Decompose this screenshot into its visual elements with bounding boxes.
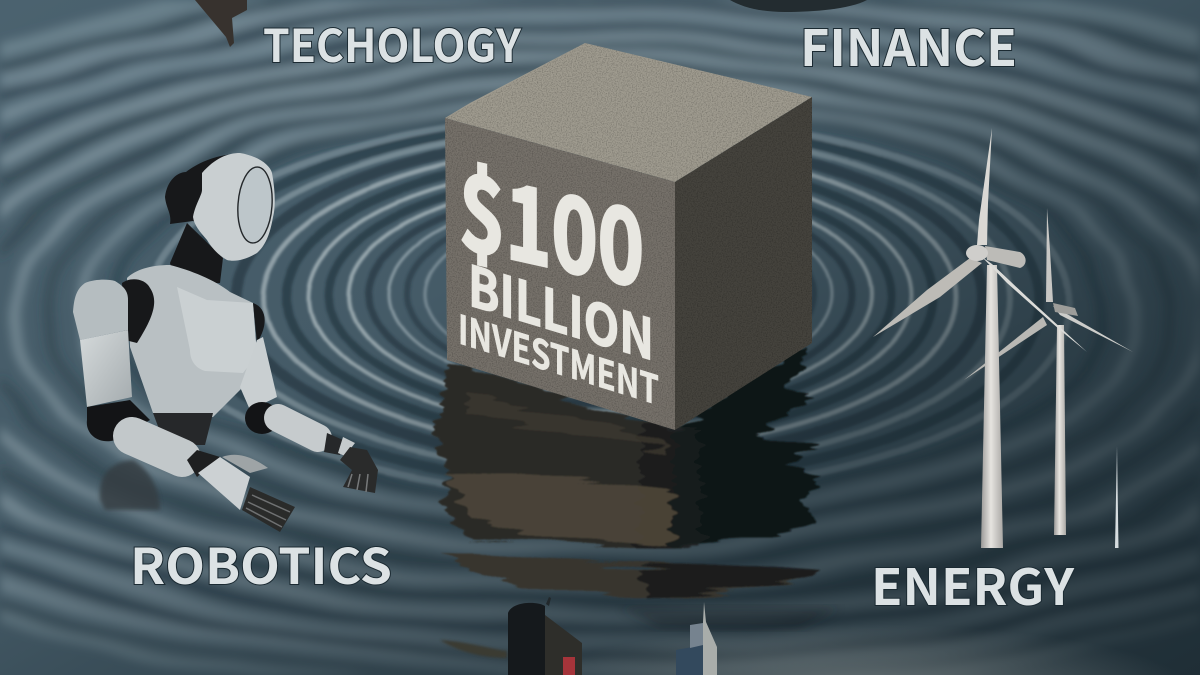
robot neck <box>170 223 223 285</box>
reflection: streaked body <box>436 345 822 598</box>
glass tower <box>676 602 717 675</box>
cube right face <box>675 97 812 430</box>
city skyline <box>508 597 717 675</box>
robot far shoulder joint <box>253 303 265 343</box>
robot far forearm <box>278 418 318 438</box>
technology icon fragment <box>195 0 247 47</box>
cube top face <box>445 43 812 182</box>
robot far wrist <box>324 433 343 455</box>
robot thumb plate <box>222 455 268 473</box>
cube left face <box>445 118 675 430</box>
distant mast <box>1115 446 1118 548</box>
label: technology: TECHOLOGY <box>263 10 522 75</box>
robot fingers <box>242 487 295 532</box>
central ripples <box>150 115 1070 495</box>
wind turbines <box>873 128 1133 548</box>
robot base wheel <box>100 460 160 510</box>
label: energy: ENERGY <box>871 548 1075 620</box>
rear turbine <box>964 208 1133 535</box>
robot elbow <box>87 400 150 441</box>
cube label <box>458 127 659 417</box>
robot shoulder joint <box>122 279 154 343</box>
robot far hand <box>340 447 378 493</box>
dollar amount: $100 <box>459 127 644 318</box>
cube grain texture <box>445 43 812 430</box>
robot far elbow <box>245 402 279 434</box>
dark tower <box>508 597 582 675</box>
robot upper arm cap <box>73 280 128 340</box>
cube <box>445 43 812 430</box>
robot hand plate <box>198 457 250 510</box>
billion word: BILLION <box>468 241 654 377</box>
robot waist <box>153 413 213 445</box>
label: finance: FINANCE <box>800 9 1017 81</box>
investment word: INVESTMENT <box>458 297 659 417</box>
robot chest plate <box>177 287 257 373</box>
front turbine <box>873 128 1087 548</box>
sky beneath reflection <box>440 608 1200 675</box>
robot wrist <box>187 450 220 477</box>
reflection of cube in water <box>436 345 822 598</box>
robot far arm <box>240 337 277 410</box>
label: robotics: ROBOTICS <box>130 528 392 599</box>
robot torso <box>127 265 257 417</box>
finance icon fragment <box>730 0 867 12</box>
robot <box>73 153 378 532</box>
robot forearm <box>132 436 182 458</box>
robot head <box>165 153 275 261</box>
robot upper arm <box>80 330 132 407</box>
